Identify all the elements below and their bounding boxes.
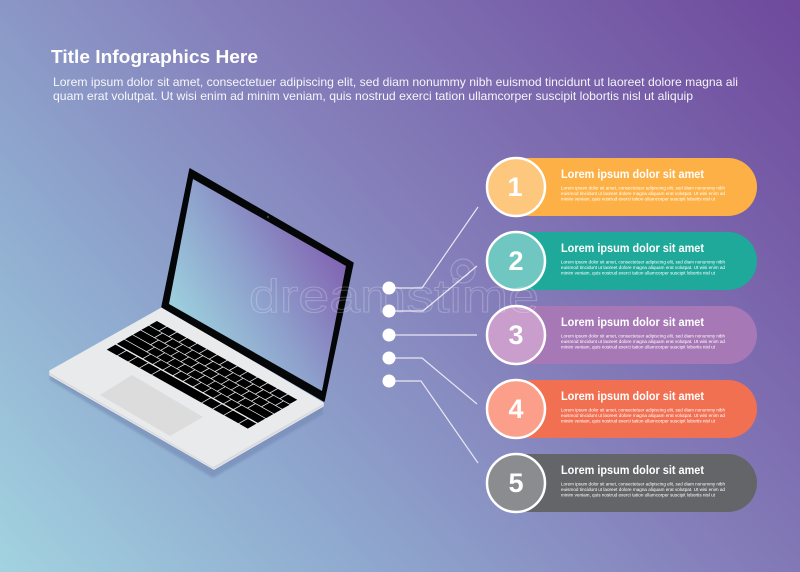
item 2: 2: [508, 246, 524, 276]
item 4: Lorem ipsum dolor sit amet: [561, 391, 704, 403]
watermark: [249, 259, 539, 322]
item 3: minim veniam, quis nostrud exerci tation ullamcorper suscipit lobortis nisl ut: [561, 344, 716, 350]
item 5: minim veniam, quis nostrud exerci tation ullamcorper suscipit lobortis nisl ut: [561, 492, 716, 498]
item 4: Lorem ipsum dolor sit amet, consectetuer adipiscing elit, sed diam nonummy nibh: [561, 408, 725, 414]
item 5: 5: [508, 468, 524, 498]
item 1: minim veniam, quis nostrud exerci tation ullamcorper suscipit lobortis nisl ut: [561, 196, 716, 202]
trackpad: [100, 375, 203, 436]
item 5: [487, 454, 757, 512]
item 5: Lorem ipsum dolor sit amet: [561, 465, 704, 477]
keyboard: [111, 323, 294, 426]
item 4: 4: [508, 394, 524, 424]
item 2: Lorem ipsum dolor sit amet: [561, 243, 704, 255]
item 3: euismod tincidunt ut laoreet dolore magna aliquam erat volutpat. Ut wisi enim ad: [561, 339, 725, 345]
item 2: [487, 232, 757, 290]
item 2: minim veniam, quis nostrud exerci tation ullamcorper suscipit lobortis nisl ut: [561, 270, 716, 276]
item 4: euismod tincidunt ut laoreet dolore magna aliquam erat volutpat. Ut wisi enim ad: [561, 413, 725, 419]
intro text: Lorem ipsum dolor sit amet, consectetuer adipiscing elit, sed diam nonummy nibh euismod tincidunt ut laoreet dolore magna ali: [53, 75, 738, 89]
intro text: [53, 75, 738, 103]
item 1: 1: [507, 172, 523, 202]
connector dots: [382, 282, 396, 388]
laptop shadow: [50, 372, 323, 478]
item 5: euismod tincidunt ut laoreet dolore magna aliquam erat volutpat. Ut wisi enim ad: [561, 487, 725, 493]
item 2: Lorem ipsum dolor sit amet, consectetuer adipiscing elit, sed diam nonummy nibh: [561, 260, 725, 266]
item 1: Lorem ipsum dolor sit amet, consectetuer adipiscing elit, sed diam nonummy nibh: [561, 186, 725, 192]
laptop base: [50, 308, 323, 469]
item 1: euismod tincidunt ut laoreet dolore magna aliquam erat volutpat. Ut wisi enim ad: [561, 191, 725, 197]
screen bezel: [162, 169, 353, 401]
item 3: Lorem ipsum dolor sit amet, consectetuer adipiscing elit, sed diam nonummy nibh: [561, 334, 725, 340]
intro text: quam erat volutpat. Ut wisi enim ad minim veniam, quis nostrud exerci tation ullamcorper suscipit lobortis nisl ut aliquip: [53, 89, 693, 103]
title: Title Infographics Here: [51, 47, 258, 67]
item 1: [487, 158, 757, 216]
laptop illustration: [50, 169, 353, 478]
item 3: [487, 306, 757, 364]
watermark: dreamstime: [249, 270, 539, 322]
item 4: [487, 380, 757, 438]
item 3: 3: [508, 320, 524, 350]
item 2: euismod tincidunt ut laoreet dolore magna aliquam erat volutpat. Ut wisi enim ad: [561, 265, 725, 271]
item 5: Lorem ipsum dolor sit amet, consectetuer adipiscing elit, sed diam nonummy nibh: [561, 482, 725, 488]
item 1: Lorem ipsum dolor sit amet: [561, 169, 704, 181]
webcam: [267, 216, 269, 218]
screen display: [169, 179, 346, 391]
connector lines: [389, 207, 478, 463]
item 4: minim veniam, quis nostrud exerci tation ullamcorper suscipit lobortis nisl ut: [561, 418, 716, 424]
item 3: Lorem ipsum dolor sit amet: [561, 317, 704, 329]
